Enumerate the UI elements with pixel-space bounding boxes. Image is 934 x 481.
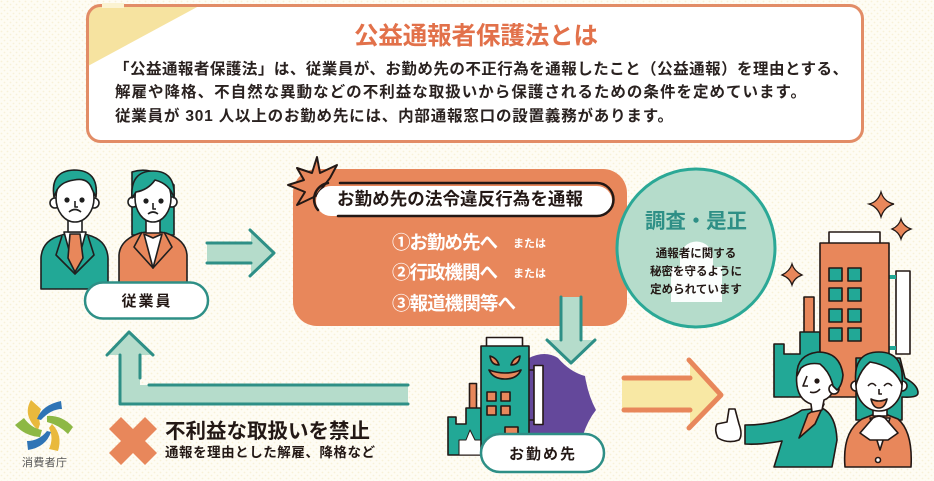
panel: investigation circle: 秘密を守るように [650,264,742,278]
label: employees pill [85,282,208,318]
arrow: retaliation return [107,332,408,404]
text block: explanation: 従業員が 301 人以上のお勤め先には、内部通報窓口の設置義務があります。 [115,106,673,125]
panel: investigation circle [617,169,775,327]
text block: explanation: 「公益通報者保護法」は、従業員が、お勤め先の不正行為を通報したこと（公益通報）を理由とする、 [114,59,848,78]
text block: explanation [114,59,848,125]
heading pill: お勤め先の法令違反行為を通報 [337,189,584,209]
arrow: employees to report [207,230,274,276]
panel: investigation circle: 調査・是正 [645,210,747,233]
panel: reporting destinations [288,157,627,326]
icon: consumer affairs agency logo [15,400,73,469]
panel: investigation circle: 定められています [650,283,742,296]
label: workplace pill [481,434,604,472]
list: destinations: ①お勤め先へ [392,232,498,253]
icon: consumer affairs agency logo: 消費者庁 [22,455,67,469]
label: employees pill: 従業員 [121,292,173,310]
list: destinations: または [513,267,546,280]
icon: workplace building [448,338,596,455]
icon: worried employees [41,170,187,289]
icon: starburst [288,157,337,205]
icon: clean company building [774,232,918,420]
panel: investigation circle: 通報者に関する [656,246,736,260]
panel: definition header [88,3,862,142]
heading pill [314,183,614,216]
icon: lock [671,242,722,302]
arrow: report to workplace [547,297,595,363]
text block: prohibition: 不利益な取扱いを禁止 [165,420,370,443]
label: workplace pill: お勤め先 [509,445,577,463]
text block: prohibition [165,420,376,460]
icon: happy employees [716,352,911,467]
list: destinations: ②行政機関へ [392,262,498,283]
text block: explanation: 解雇や降格、不自然な異動などの不利益な取扱いから保護されるための条件を定めています。 [115,82,806,101]
arrow: outcome [622,360,721,428]
list: destinations: または [513,237,546,250]
title: 公益通報者保護法とは [354,22,598,50]
icon: sparkles [782,192,911,285]
list: destinations: ③報道機関等へ [392,293,516,314]
list: destinations [392,232,546,314]
icon: prohibition cross [109,417,157,465]
text block: prohibition: 通報を理由とした解雇、降格など [165,444,376,460]
